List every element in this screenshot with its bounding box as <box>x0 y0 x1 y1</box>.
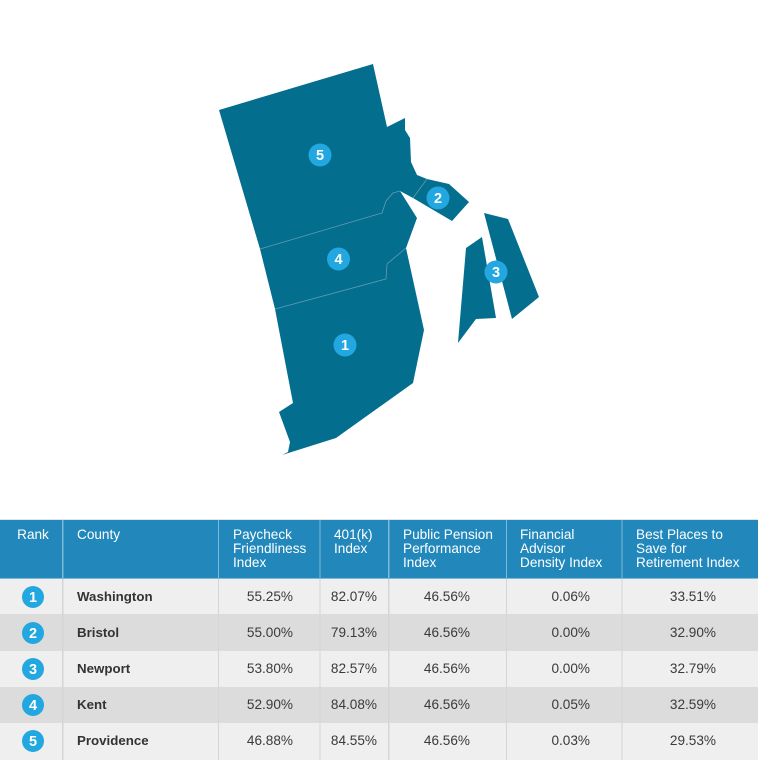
row: Newport: 3 <box>29 662 37 678</box>
row: Newport: 0.00% <box>551 661 590 676</box>
header: Public Pension Performance Index: Public Pension <box>403 527 493 542</box>
row: Bristol: 0.00% <box>551 625 590 640</box>
row: Washington: 0.06% <box>551 589 590 604</box>
county: Kent <box>260 191 417 309</box>
county borders <box>260 179 427 309</box>
row: Washington: 1 <box>29 590 37 606</box>
marker: 2 <box>426 186 450 210</box>
marker: 1 <box>334 334 356 356</box>
row: Bristol: 79.13% <box>331 625 377 640</box>
header: Best Places to Save for Retirement Index: Retirement Index <box>636 555 740 570</box>
row: Washington: 33.51% <box>670 589 716 604</box>
county: Providence <box>219 64 427 249</box>
row: Bristol: Bristol <box>77 625 119 640</box>
county: Washington <box>275 248 424 455</box>
row: Washington: Washington <box>77 589 153 604</box>
header: Public Pension Performance Index: Performance <box>403 541 481 556</box>
row: Newport: 82.57% <box>331 661 377 676</box>
row: Washington: 46.56% <box>424 589 470 604</box>
county: Bristol <box>413 179 469 221</box>
row: Kent: 84.08% <box>331 697 377 712</box>
row: Kent: 46.56% <box>424 697 470 712</box>
header: County: County <box>77 527 120 542</box>
row: Kent: 32.59% <box>670 697 716 712</box>
row: Bristol: 46.56% <box>424 625 470 640</box>
table header <box>0 519 758 578</box>
marker: 2: 2 <box>434 191 442 207</box>
header: Paycheck Friendliness Index: Friendliness <box>233 541 306 556</box>
header: Financial Advisor Density Index: Advisor <box>520 541 566 556</box>
row: Providence: 29.53% <box>670 733 716 748</box>
header: 401(k) Index: 401(k) <box>334 527 373 542</box>
row: Washington <box>0 578 758 614</box>
row: Providence <box>0 723 758 760</box>
row: Washington: 55.25% <box>247 589 293 604</box>
row: Kent: Kent <box>77 697 107 712</box>
header: Paycheck Friendliness Index: Index <box>233 555 266 570</box>
row: Newport: 46.56% <box>424 661 470 676</box>
row: Kent: 0.05% <box>551 697 590 712</box>
header: Best Places to Save for Retirement Index: Save for <box>636 541 687 556</box>
row: Providence: 84.55% <box>331 733 377 748</box>
row: Bristol: 2 <box>29 626 37 642</box>
row: Bristol: 32.90% <box>670 625 716 640</box>
row: Providence: 5 <box>29 734 37 750</box>
header: Rank: Rank <box>17 527 49 542</box>
row: Bristol: 55.00% <box>247 625 293 640</box>
header: Public Pension Performance Index: Index <box>403 555 436 570</box>
map: Rhode Island counties <box>219 64 539 455</box>
row: Providence: Providence <box>77 733 149 748</box>
row: Providence: 46.88% <box>247 733 293 748</box>
header: Financial Advisor Density Index: Density Index <box>520 555 603 570</box>
row: Bristol <box>0 614 758 651</box>
row: Providence: 46.56% <box>424 733 470 748</box>
marker: 4 <box>327 248 350 270</box>
row: Providence: 0.03% <box>551 733 590 748</box>
row: Newport <box>0 651 758 687</box>
marker: 3: 3 <box>492 265 500 281</box>
marker: 4: 4 <box>334 252 343 268</box>
table: county rankings <box>0 519 758 760</box>
row: Newport: 32.79% <box>670 661 716 676</box>
row: Washington: 82.07% <box>331 589 377 604</box>
header: 401(k) Index: Index <box>334 541 367 556</box>
row: Newport: Newport <box>77 661 131 676</box>
marker: 3 <box>484 260 508 284</box>
row: Kent: 4 <box>29 698 37 714</box>
row: Kent: 52.90% <box>247 697 293 712</box>
county: Newport <box>458 213 539 343</box>
marker: 5: 5 <box>316 148 324 164</box>
header: Best Places to Save for Retirement Index: Best Places to <box>636 527 723 542</box>
row: Kent <box>0 687 758 723</box>
marker: 1: 1 <box>341 338 349 354</box>
header: Financial Advisor Density Index: Financial <box>520 527 574 542</box>
row: Newport: 53.80% <box>247 661 293 676</box>
marker: 5 <box>308 144 332 166</box>
header: Paycheck Friendliness Index: Paycheck <box>233 527 292 542</box>
